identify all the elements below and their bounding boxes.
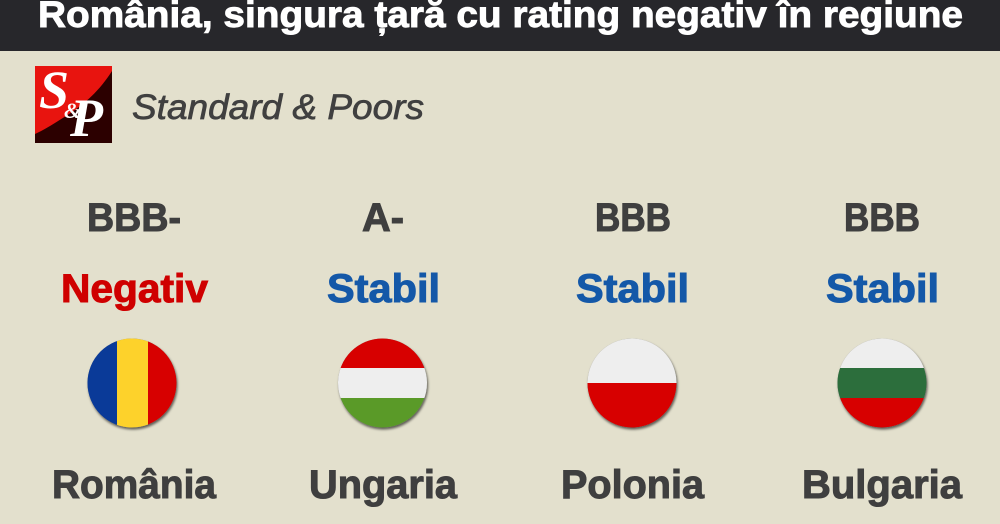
- icon: S&P logo: P: [69, 88, 104, 148]
- country name: România: [52, 463, 217, 507]
- subtitle: agency name: Standard & Poors: [132, 88, 424, 127]
- rating: BBB-: [87, 196, 181, 240]
- icon: flag of Poland: [587, 338, 678, 428]
- column: Hungary: [309, 196, 458, 507]
- icon: S&P logo: S: [39, 60, 69, 120]
- column: Poland: [561, 196, 705, 507]
- country name: Bulgaria: [802, 463, 963, 507]
- icon: flag of Romania: [87, 338, 178, 428]
- outlook: Stabil: [327, 267, 440, 311]
- rating: A-: [362, 196, 404, 240]
- rating: BBB: [595, 196, 671, 240]
- country name: Polonia: [561, 463, 705, 507]
- outlook: Negativ: [61, 267, 209, 311]
- column: Romania: [52, 196, 217, 507]
- title bar: [0, 0, 1000, 51]
- icon: S&P logo: [35, 60, 112, 148]
- outlook: Stabil: [826, 267, 939, 311]
- column: Bulgaria: [802, 196, 963, 507]
- icon: flag of Bulgaria: [837, 338, 928, 428]
- icon: flag of Hungary: [337, 338, 428, 428]
- rating: BBB: [844, 196, 920, 240]
- outlook: Stabil: [576, 267, 689, 311]
- icon: S&P logo: &: [64, 98, 81, 123]
- country name: Ungaria: [309, 463, 458, 507]
